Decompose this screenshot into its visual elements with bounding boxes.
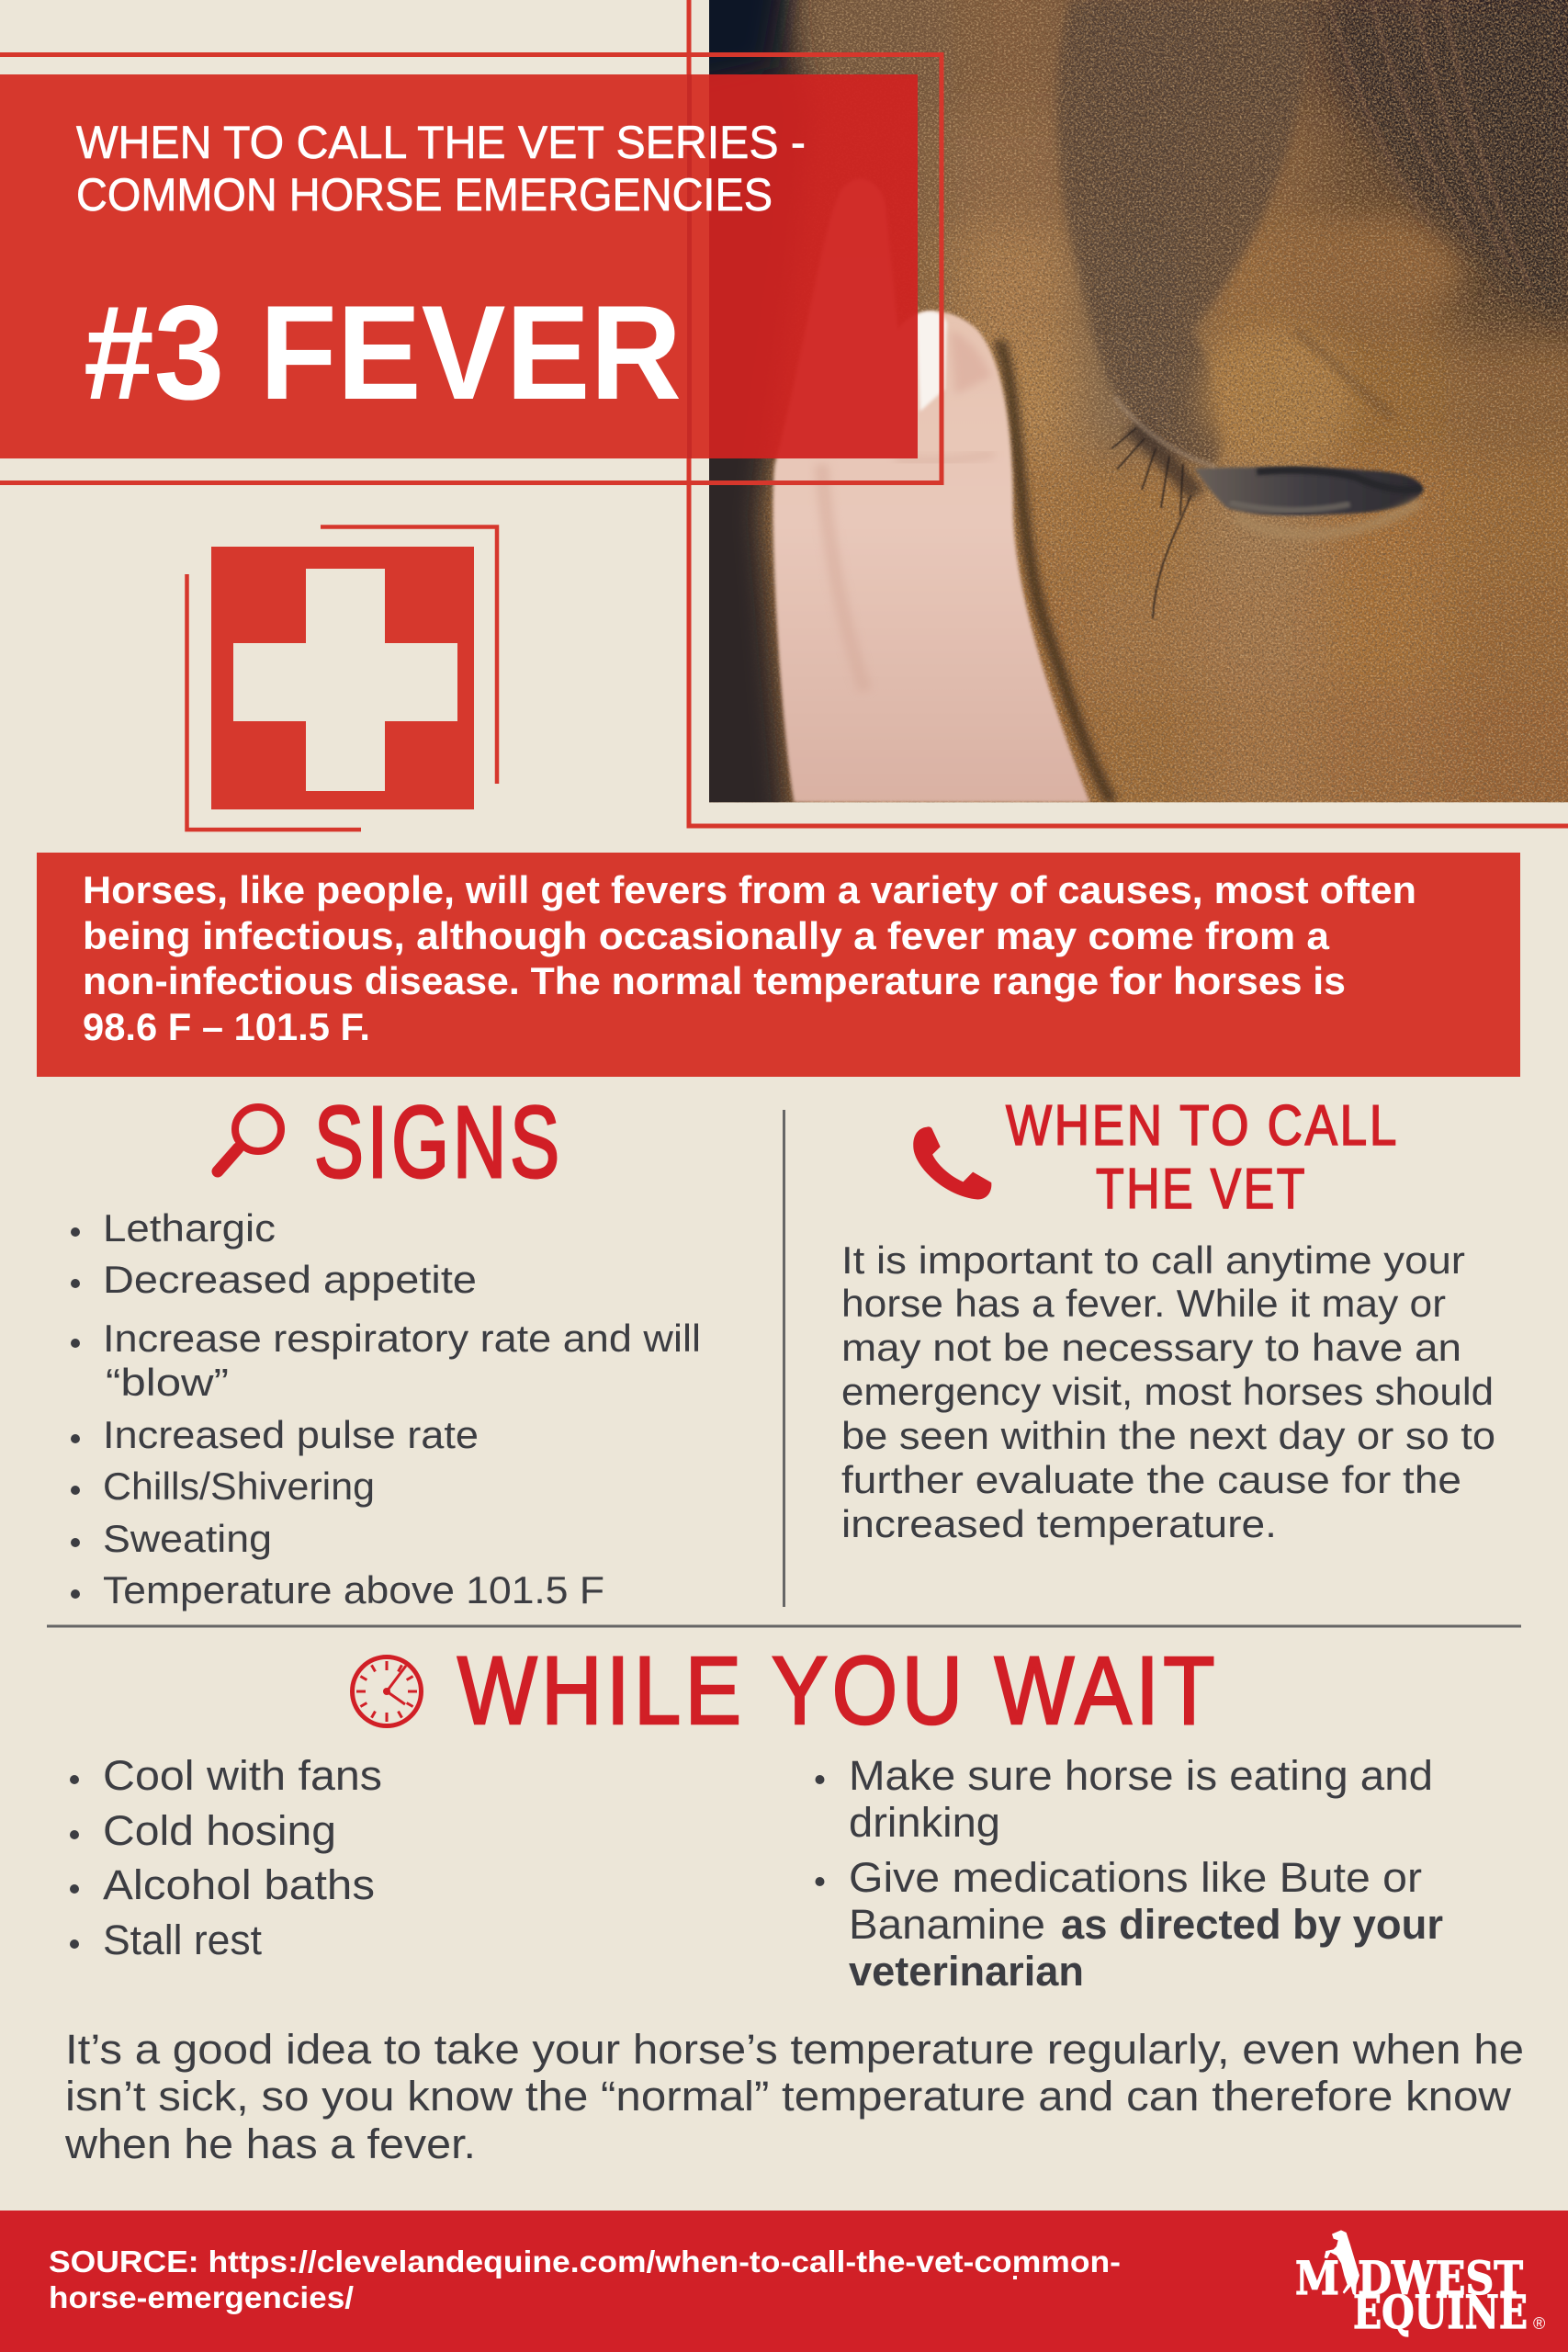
list: signs [71,1206,701,1611]
text block: when to call: may not be necessary to have an [841,1326,1461,1369]
list: signs: Increased pulse rate [103,1413,479,1456]
series heading: COMMON HORSE EMERGENCIES [76,169,773,220]
section divider [47,1624,1521,1628]
list: while you wait, left [70,1752,382,1963]
text block: when to call: increased temperature. [841,1502,1277,1545]
panel: intro: non-infectious disease. The normal temperature range for horses is [83,959,1346,1002]
heading: when to call the vet: THE VET [1096,1158,1307,1221]
list: while you wait, right: drinking [849,1799,1000,1846]
text block: when to call: further evaluate the cause for the [841,1458,1461,1501]
text block: when to call: be seen within the next day or so to [841,1414,1495,1457]
text block: temperature tip [64,2026,1524,2167]
icon: rearing horse [1325,2230,1359,2296]
text block: temperature tip: isn’t sick, so you know the “normal” temperature and can therefore know [65,2073,1512,2120]
series heading: WHEN TO CALL THE VET SERIES - [76,117,806,168]
icon: medical cross [187,527,497,830]
icon: phone [913,1126,991,1200]
panel: intro [37,853,1520,1077]
list: signs: “blow” [106,1361,229,1404]
list: while you wait, right: Give medications like Bute or [849,1854,1422,1901]
heading: while you wait: WHILE YOU WAIT [457,1637,1219,1745]
list: while you wait, left: Stall rest [103,1917,262,1963]
list: signs: Increase respiratory rate and will [103,1317,701,1360]
list: while you wait, right [816,1752,1443,1995]
text block: temperature tip: It’s a good idea to take your horse’s temperature regularly, even when he [65,2026,1524,2073]
list: while you wait, right: veterinarian [849,1948,1084,1995]
text block: temperature tip: when he has a fever. [64,2120,476,2167]
heading: signs: SIGNS [314,1086,563,1199]
source citation: horse-emergencies/ [49,2280,354,2314]
panel: intro: being infectious, although occasionally a fever may come from a [83,914,1330,957]
title panel [0,55,942,483]
panel: intro: 98.6 F – 101.5 F. [83,1005,370,1048]
source citation: SOURCE: https://clevelandequine.com/when-to-call-the-vet-common- [49,2245,1121,2278]
text block: when to call: It is important to call anytime your [841,1238,1465,1282]
list: while you wait, right: as directed by your [1061,1901,1443,1948]
panel: intro: Horses, like people, will get fevers from a variety of causes, most often [83,868,1416,911]
title frame [0,55,942,483]
list: while you wait, right: Banamine [849,1901,1045,1948]
panel: while you wait [70,1637,1443,1995]
logo: Midwest Equine [1295,2230,1545,2339]
heading: when to call the vet: WHEN TO CALL [1006,1094,1399,1158]
text block: when to call: emergency visit, most horses should [841,1370,1494,1413]
list: signs: Chills/Shivering [103,1464,375,1508]
logo: Midwest Equine: M [1295,2251,1339,2305]
list: while you wait, left: Cold hosing [103,1807,336,1854]
panel: signs [71,1086,701,1611]
list: signs: Decreased appetite [103,1258,477,1301]
logo: Midwest Equine: EQUINE [1353,2285,1528,2339]
list: while you wait, left: Cool with fans [103,1752,382,1799]
list: signs: Sweating [103,1517,272,1560]
title: #3 Fever: #3 FEVER [84,277,682,427]
icon: clock [353,1657,421,1725]
logo: Midwest Equine: ® [1533,2314,1545,2333]
text block: when to call: horse has a fever. While it may or [841,1282,1446,1325]
text block: when to call [841,1238,1495,1545]
panel: when to call the vet [841,1094,1495,1545]
heading: when to call the vet [1006,1094,1399,1221]
list: while you wait, left: Alcohol baths [103,1861,375,1908]
list: signs: Temperature above 101.5 F [103,1568,604,1611]
logo: Midwest Equine: DWEST [1358,2251,1523,2305]
footer band [0,2211,1568,2352]
series heading [76,117,806,220]
vertical frame around photo [689,0,1568,826]
list: signs: Lethargic [103,1206,276,1250]
list: while you wait, right: Make sure horse is eating and [849,1752,1433,1799]
icon: magnifying glass [218,1107,281,1171]
photo: horse face with hand [709,0,1568,803]
source citation [49,2245,1121,2314]
column divider [783,1110,785,1607]
